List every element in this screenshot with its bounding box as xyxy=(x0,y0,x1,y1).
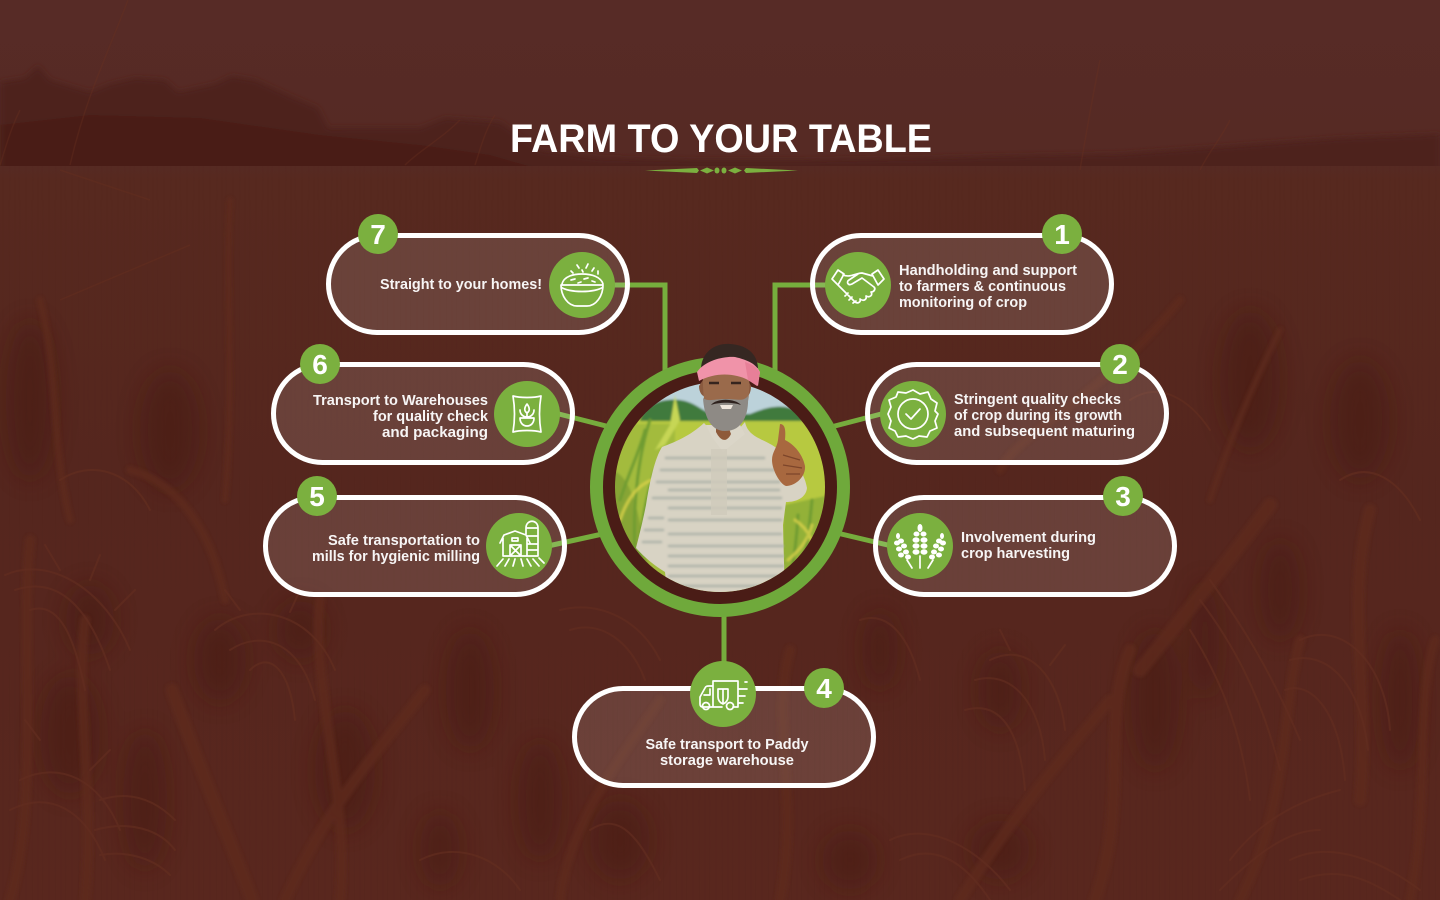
badge 1 xyxy=(1042,214,1082,254)
text: handholding xyxy=(899,263,1077,311)
text: mills: mills for hygienic milling xyxy=(312,549,480,565)
dark gaps between stalks xyxy=(6,310,1420,890)
text: quality checks xyxy=(954,392,1135,440)
text: harvesting: crop harvesting xyxy=(961,546,1070,562)
badge 4 xyxy=(804,668,844,708)
card 5: mills xyxy=(266,476,564,594)
text: handholding: to farmers & continuous xyxy=(899,279,1066,295)
badge 3: 3 xyxy=(1115,481,1131,512)
card 6: warehouses xyxy=(274,344,572,462)
text: warehouses: Transport to Warehouses xyxy=(313,393,488,409)
icon: quality seal xyxy=(880,381,946,447)
text: harvesting: Involvement during xyxy=(961,530,1096,546)
thin distant stems xyxy=(0,0,1230,300)
text: harvesting xyxy=(961,530,1096,562)
kurta xyxy=(636,422,807,600)
connector lines from hub to cards xyxy=(548,285,892,670)
central hub: ring and farmer photo xyxy=(596,344,844,610)
thumbs-up hand xyxy=(772,424,805,486)
badge 2: 2 xyxy=(1112,349,1128,380)
card 7: straight to homes xyxy=(328,214,628,332)
text: quality checks: and subsequent maturing xyxy=(954,424,1135,440)
pink head wrap xyxy=(697,357,760,386)
badge 5 xyxy=(297,476,337,516)
text: mills: Safe transportation to xyxy=(328,533,480,549)
badge 6 xyxy=(300,344,340,384)
farmer photo background xyxy=(615,384,825,592)
text: safe transport: Safe transport to Paddy xyxy=(646,737,808,753)
badge 4: 4 xyxy=(816,673,832,704)
badge 2 xyxy=(1100,344,1140,384)
title: FARM TO YOUR TABLE xyxy=(510,117,932,161)
badge 7 xyxy=(358,214,398,254)
tree line on the horizon xyxy=(0,70,1438,166)
text: mills xyxy=(312,533,480,565)
badge 3 xyxy=(1103,476,1143,516)
card 4: safe transport xyxy=(574,661,874,786)
icon: handshake xyxy=(825,252,891,318)
badge 1: 1 xyxy=(1054,219,1070,250)
badge 7: 7 xyxy=(370,219,386,250)
text: quality checks: of crop during its growth xyxy=(954,408,1122,424)
text: handholding: monitoring of crop xyxy=(899,295,1027,311)
text: straight to your homes: Straight to your homes! xyxy=(380,277,542,293)
card 2: quality checks xyxy=(868,344,1166,462)
text: warehouses: for quality check xyxy=(373,409,489,425)
icon: rice bowl xyxy=(549,252,615,318)
icon: grain sack xyxy=(494,381,560,447)
text: safe transport xyxy=(646,737,808,769)
text: warehouses: and packaging xyxy=(382,425,488,441)
rice panicles xyxy=(5,392,1420,900)
text: handholding: Handholding and support xyxy=(899,263,1077,279)
text: quality checks: Stringent quality checks xyxy=(954,392,1121,408)
green ring xyxy=(596,364,844,610)
icon: wheat xyxy=(887,513,953,579)
badge 6: 6 xyxy=(312,349,328,380)
farmer head xyxy=(697,344,760,431)
text: warehouses xyxy=(313,393,489,441)
text: safe transport: storage warehouse xyxy=(660,753,794,769)
card 1: handholding xyxy=(812,214,1112,332)
card 3: harvesting xyxy=(876,476,1174,594)
thick stalks and leaves xyxy=(10,200,1435,900)
icon: delivery truck xyxy=(690,661,756,727)
icon: barn and silo xyxy=(486,513,552,579)
title ornament xyxy=(645,168,798,174)
badge 5: 5 xyxy=(309,481,325,512)
